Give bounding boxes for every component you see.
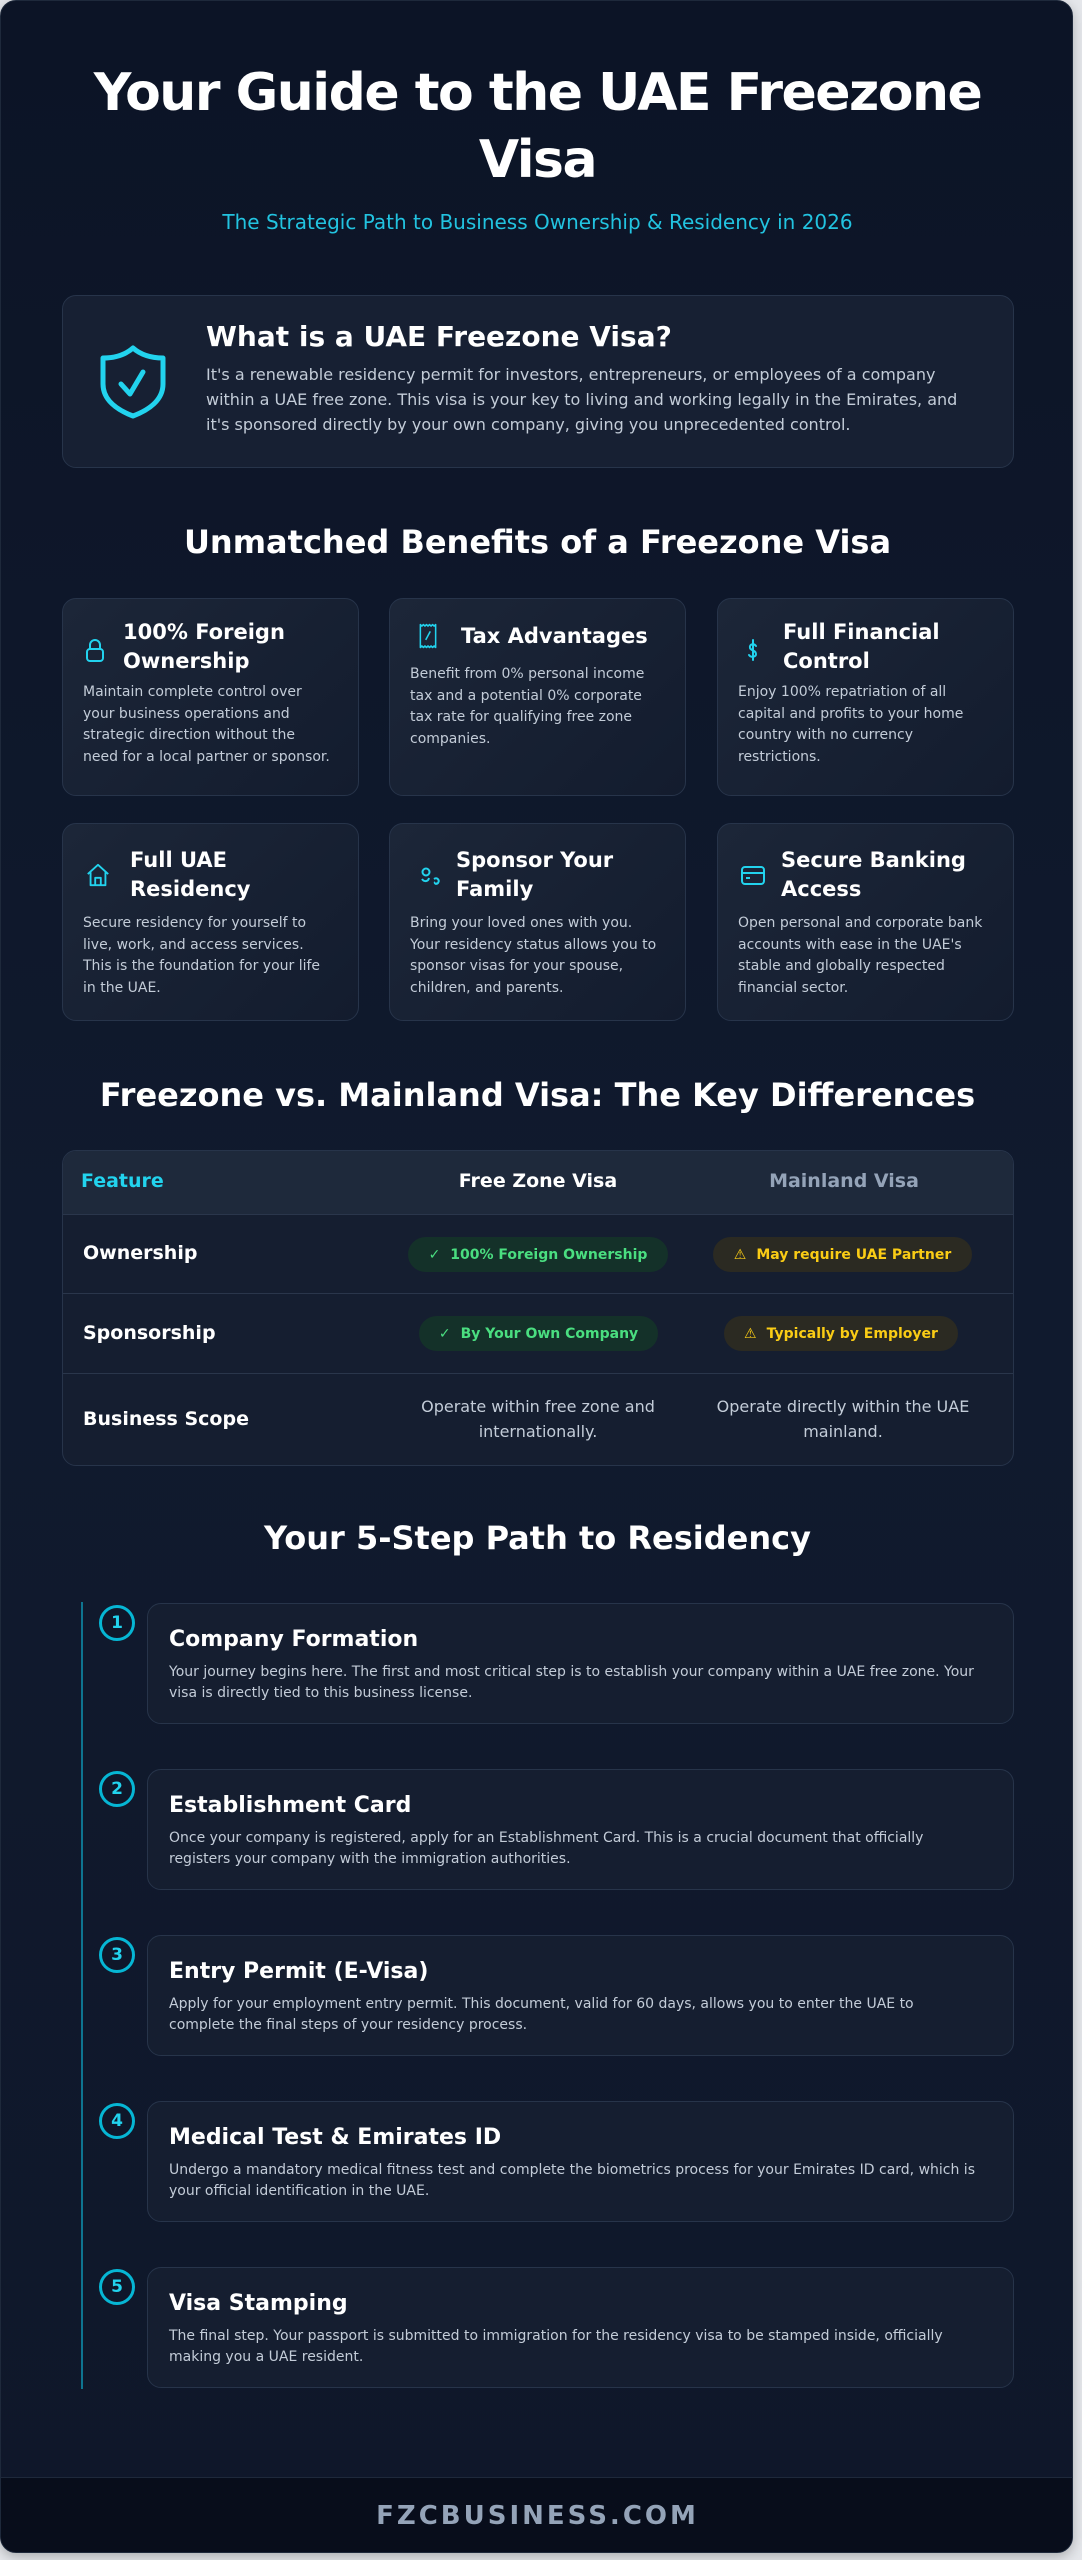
step 4: your official identification in the UAE. <box>169 2183 429 2199</box>
text: tax rate for qualifying free zone <box>410 709 632 725</box>
text: Open personal and corporate bank <box>738 915 982 931</box>
title: Family <box>456 877 533 901</box>
text: financial sector. <box>738 980 848 996</box>
title: Residency <box>130 877 250 901</box>
step 5: 5 <box>111 2277 123 2297</box>
row: ownership <box>63 1214 1015 1293</box>
text: need for a local partner or sponsor. <box>83 748 330 764</box>
title: Full UAE <box>130 848 227 872</box>
icon: shield check <box>100 345 166 418</box>
heading: comparison: Freezone vs. Mainland Visa: The Key Differences <box>100 1076 975 1114</box>
table header <box>63 1151 1015 1214</box>
step 5: making you a UAE resident. <box>169 2349 363 2365</box>
row: ownership: ✓ <box>429 1246 440 1262</box>
text: sponsor visas for your spouse, <box>410 958 623 974</box>
text <box>738 684 963 764</box>
title: Sponsor Your <box>456 848 613 872</box>
step 1 <box>99 1603 1014 1724</box>
step 5: Visa Stamping <box>169 2291 348 2316</box>
step 4: 4 <box>111 2111 123 2131</box>
heading: steps: Your 5-Step Path to Residency <box>264 1519 811 1557</box>
text <box>738 915 982 996</box>
table header: Free Zone Visa <box>459 1170 617 1192</box>
title <box>783 620 940 673</box>
row: ownership: Ownership <box>83 1242 197 1264</box>
title: Your Guide to the UAE Freezone <box>94 63 981 123</box>
text: Maintain complete control over <box>83 684 302 700</box>
step 3: Entry Permit (E-Visa) <box>169 1959 428 1984</box>
title: Visa <box>479 130 596 190</box>
row: business scope <box>63 1373 1015 1467</box>
subtitle: The Strategic Path to Business Ownership & Residency in 2026 <box>222 210 853 234</box>
text: children, and parents. <box>410 980 564 996</box>
title <box>781 848 966 901</box>
title: Ownership <box>123 649 249 673</box>
title: Secure Banking <box>781 848 966 872</box>
step 3: Apply for your employment entry permit. This document, valid for 60 days, allows you to enter the UAE to <box>169 1996 914 2012</box>
panel: what is <box>62 295 1014 468</box>
text: Secure residency for yourself to <box>83 915 306 931</box>
step 1: Your journey begins here. The first and most critical step is to establish your company within a UAE free zone. Your <box>169 1664 974 1680</box>
table: comparison <box>62 1150 1014 1466</box>
step 3 <box>99 1935 1014 2056</box>
row: sponsorship: Typically by Employer <box>767 1326 938 1342</box>
step 5: The final step. Your passport is submitted to immigration for the residency visa to be stamped inside, officially <box>169 2328 943 2344</box>
row: sponsorship: By Your Own Company <box>461 1326 638 1342</box>
text <box>83 684 330 764</box>
text: strategic direction without the <box>83 727 295 743</box>
title <box>130 848 250 901</box>
title <box>93 63 981 190</box>
row: sponsorship: Sponsorship <box>83 1322 216 1344</box>
title <box>123 620 285 673</box>
table header: Feature <box>81 1170 164 1192</box>
title: Tax Advantages <box>461 624 648 648</box>
text: tax and a potential 0% corporate <box>410 688 642 704</box>
step 3: 3 <box>111 1945 123 1965</box>
card: tax <box>389 598 686 796</box>
row: ownership: 100% Foreign Ownership <box>450 1246 647 1262</box>
text <box>410 666 644 746</box>
card: foreign ownership <box>62 598 359 796</box>
heading: What is a UAE Freezone Visa? <box>206 320 672 353</box>
text: Your residency status allows you to <box>410 936 656 952</box>
row: business scope: Operate within free zone and internationally. <box>421 1397 655 1441</box>
card: residency <box>62 823 359 1021</box>
text: This is the foundation for your life <box>83 958 320 974</box>
icon: dollar <box>748 639 757 661</box>
text: Benefit from 0% personal income <box>410 666 644 682</box>
step 2: Establishment Card <box>169 1793 411 1818</box>
step 1: Company Formation <box>169 1627 418 1652</box>
row: sponsorship <box>63 1293 1015 1373</box>
title: 100% Foreign <box>123 620 285 644</box>
footer: FZCBUSINESS.COM <box>376 2501 699 2531</box>
row: ownership: ⚠ <box>734 1246 746 1262</box>
text: capital and profits to your home <box>738 706 963 722</box>
row: sponsorship: ⚠ <box>744 1326 757 1342</box>
step 2: registers your company with the immigration authorities. <box>169 1851 571 1867</box>
row: ownership: May require UAE Partner <box>756 1246 951 1262</box>
step 4 <box>99 2101 1014 2222</box>
step 2: 2 <box>111 1779 123 1799</box>
table header: Mainland Visa <box>769 1170 919 1192</box>
text: accounts with ease in the UAE's <box>738 936 962 952</box>
card: financial control <box>717 598 1014 796</box>
text: within a UAE free zone. This visa is your key to living and working legally in the Emirates, and <box>206 390 957 409</box>
text: restrictions. <box>738 748 821 764</box>
text: Bring your loved ones with you. <box>410 915 632 931</box>
row: business scope: Business Scope <box>83 1408 249 1430</box>
text <box>410 915 656 996</box>
text <box>206 365 957 434</box>
step 4: Undergo a mandatory medical fitness test and complete the biometrics process for your Emirates ID card, which is <box>169 2162 975 2178</box>
text: in the UAE. <box>83 980 161 996</box>
step 5 <box>99 2267 1014 2388</box>
text <box>82 915 320 996</box>
text: country with no currency <box>738 727 913 743</box>
title <box>456 848 614 901</box>
icon: family <box>421 868 440 885</box>
icon: receipt <box>420 624 436 648</box>
text: companies. <box>410 730 490 746</box>
card: banking <box>717 823 1014 1021</box>
step 1: visa is directly tied to this business license. <box>169 1685 472 1701</box>
icon: lock <box>86 639 104 662</box>
text: stable and globally respected <box>738 958 945 974</box>
text: your business operations and <box>83 706 290 722</box>
step 2: Once your company is registered, apply for an Establishment Card. This is a crucial document that officially <box>169 1830 923 1846</box>
step 1: 1 <box>111 1613 123 1633</box>
icon: card <box>741 866 765 885</box>
step 4: Medical Test & Emirates ID <box>169 2125 501 2150</box>
footer <box>1 2477 1074 2554</box>
title: Control <box>783 649 870 673</box>
text: It's a renewable residency permit for investors, entrepreneurs, or employees of a company <box>206 365 935 384</box>
step 3: complete the final steps of your residency process. <box>169 2017 527 2033</box>
title: Full Financial <box>783 620 940 644</box>
row: business scope: Operate directly within the UAE mainland. <box>717 1397 969 1441</box>
timeline line <box>81 1602 83 2389</box>
text: it's sponsored directly by your own company, giving you unprecedented control. <box>206 415 851 434</box>
icon: house <box>87 864 109 886</box>
text: Enjoy 100% repatriation of all <box>738 684 946 700</box>
heading: benefits: Unmatched Benefits of a Freezone Visa <box>184 523 891 561</box>
title: Access <box>781 877 861 901</box>
step 2 <box>99 1769 1014 1890</box>
card: family <box>389 823 686 1021</box>
row: sponsorship: ✓ <box>439 1326 451 1342</box>
text: live, work, and access services. <box>83 936 304 952</box>
